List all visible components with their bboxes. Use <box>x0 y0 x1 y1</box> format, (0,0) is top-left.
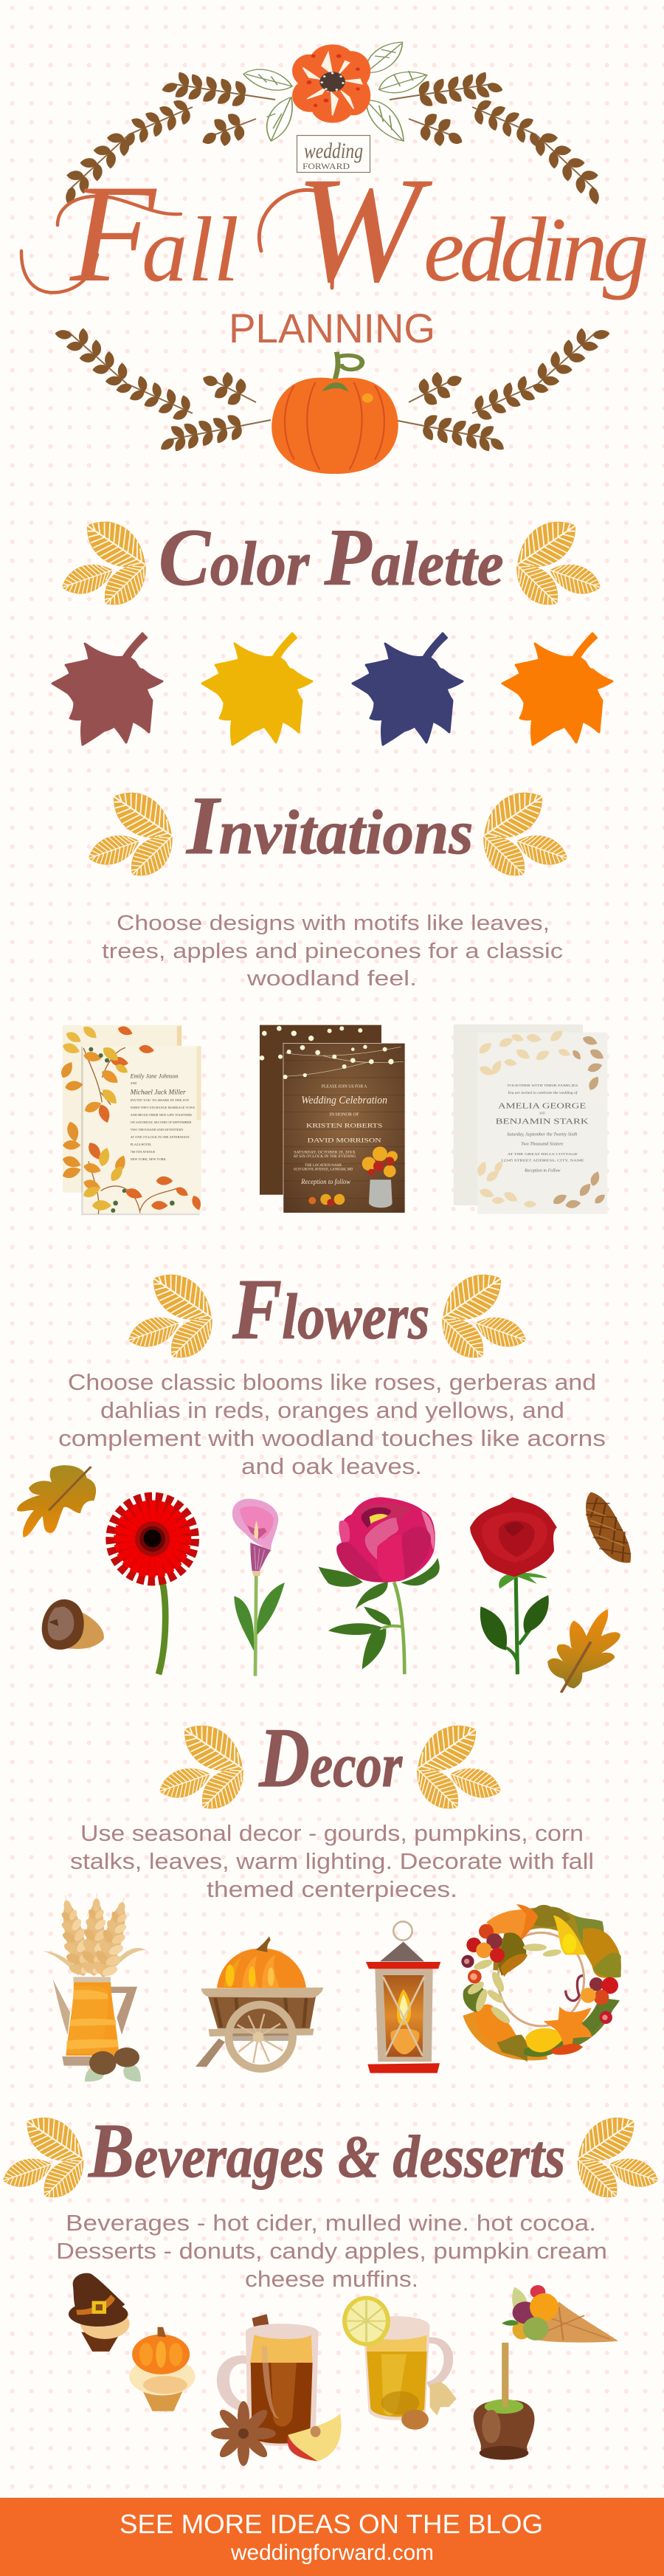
invitation cards: rustic wood: THE LOCATION NAME <box>305 1164 342 1168</box>
decor text <box>70 1820 594 1902</box>
invitation cards: watercolor leaves: AND BEGIN THEIR NEW LIFE TOGETHER <box>131 1113 192 1117</box>
invitation cards: gold foliage: BENJAMIN STARK <box>496 1118 589 1126</box>
leaf: golden yellow <box>202 633 312 745</box>
icon: oak leaf top left <box>17 1465 96 1537</box>
invitation cards: gold foliage <box>454 1024 607 1214</box>
invitation cards: rustic wood <box>260 1025 405 1213</box>
invitation cards: watercolor leaves: TWO THOUSAND AND SEVENTEEN <box>131 1128 184 1132</box>
heading text: Beverages & desserts <box>88 2109 565 2194</box>
icon: pinecone <box>586 1492 631 1563</box>
wheat ornament right <box>473 780 572 886</box>
flower with leaves <box>243 42 427 141</box>
decor: pumpkin cart <box>196 1936 323 2069</box>
logo: wedding forward: wedding <box>304 139 363 163</box>
heading text: Invitations <box>185 780 473 872</box>
wheat ornament left <box>155 1713 254 1819</box>
left branches <box>49 67 277 457</box>
invitation cards: watercolor leaves: ON SATURDAY, SECOND OF SEPTEMBER <box>131 1120 191 1125</box>
right branches <box>387 67 616 457</box>
icon: oak leaf bottom right <box>547 1609 620 1692</box>
color palette leaves <box>52 633 612 745</box>
decor: wheat in jug with acorns <box>43 1892 146 2081</box>
title: Fall Wedding <box>21 146 646 314</box>
section heading: Color Palette <box>58 509 605 615</box>
invitation cards: watercolor leaves: Emily Jane Johnson <box>130 1072 179 1080</box>
invitation cards: watercolor leaves: AT ONE O'CLOCK IN THE AFTERNOON <box>131 1135 190 1139</box>
invitation cards: watercolor leaves: PLAZA HOTEL <box>131 1143 152 1146</box>
beverage: hot cider mug <box>223 2314 319 2446</box>
wheat ornament right <box>506 509 605 615</box>
invitation cards: watercolor leaves: INVITE YOU TO SHARE IN THE JOY <box>131 1098 190 1102</box>
invitation cards: gold foliage: AMELIA GEORGE <box>498 1102 586 1110</box>
footer banner <box>0 2498 664 2576</box>
flowers text <box>58 1369 606 1479</box>
decor: lantern <box>366 1921 440 2073</box>
heading text: Color Palette <box>159 513 504 603</box>
title: Fall Wedding: all <box>142 199 262 301</box>
invitation cards: gold foliage: 12345 STREET ADDRESS, CITY, NAME <box>501 1158 585 1163</box>
wheat ornament left <box>58 509 156 615</box>
title: Fall Wedding: edding <box>423 199 646 301</box>
invitation cards: rustic wood: Reception to follow <box>300 1178 351 1186</box>
heading text: Decor <box>258 1711 403 1805</box>
decor: autumn wreath <box>461 1904 621 2062</box>
invitation cards: rustic wood: PLEASE JOIN US FOR A <box>322 1084 367 1089</box>
header wreath <box>49 42 616 457</box>
invitation cards: rustic wood: IN HONOR OF <box>330 1113 359 1117</box>
flower: red rose <box>470 1497 557 1674</box>
title: Fall Wedding: W <box>295 146 433 314</box>
section heading: Decor <box>155 1711 505 1819</box>
flower: gerbera <box>114 1501 190 1674</box>
section heading: Flowers <box>124 1261 530 1368</box>
beverages text: cheese muffins. <box>245 2266 418 2292</box>
invitations text: woodland feel. <box>246 967 417 991</box>
leaf: orange <box>502 633 612 745</box>
dessert: fruit cornucopia <box>502 2285 618 2343</box>
invitation cards: watercolor leaves: WHEN THEY EXCHANGE MARRIAGE VOWS <box>131 1106 196 1109</box>
invitation cards: watercolor leaves: AND <box>131 1081 136 1085</box>
subtitle: PLANNING: PLANNING <box>229 305 435 351</box>
dessert: pilgrim hat cupcake <box>69 2273 130 2352</box>
flowers text: dahlias in reds, oranges and yellows, and <box>100 1397 564 1423</box>
invitation cards: gold foliage: TOGETHER WITH THEIR FAMILIES <box>507 1084 578 1087</box>
invitations text: Choose designs with motifs like leaves, <box>117 912 550 935</box>
icon: acorn <box>42 1599 104 1650</box>
logo: wedding forward <box>297 136 370 173</box>
invitation cards: rustic wood: 6119 GROVE AVENUE, LANHAM, MD <box>294 1168 353 1171</box>
wheat ornament right <box>432 1262 530 1368</box>
invitation cards: rustic wood: SATURDAY, OCTOBER 28, 20XX <box>294 1151 356 1155</box>
wheat ornament right <box>407 1713 505 1819</box>
icon: star anise <box>211 2401 276 2466</box>
flowers text: complement with woodland touches like acorns <box>58 1425 606 1451</box>
beverage: lemon mug with ginger and almond <box>342 2296 457 2430</box>
beverages text <box>56 2210 607 2292</box>
wheat ornament right <box>567 2106 663 2207</box>
heading text: Flowers <box>232 1261 429 1357</box>
logo: wedding forward: FORWARD <box>302 161 350 171</box>
flowers text: Choose classic blooms like roses, gerberas and <box>68 1369 596 1395</box>
title: Fall Wedding: F <box>69 156 157 311</box>
invitation cards: rustic wood: Wedding Celebration <box>301 1095 387 1106</box>
invitation cards: watercolor leaves: Michael Jack Miller <box>130 1089 186 1096</box>
footer website: weddingforward.com <box>230 2541 434 2565</box>
section heading: Beverages & desserts <box>0 2106 663 2207</box>
decor text: stalks, leaves, warm lighting. Decorate with fall <box>70 1848 594 1874</box>
invitation cards: gold foliage: Saturday, September the Twenty Sixth <box>507 1133 577 1137</box>
decor text: themed centerpieces. <box>207 1876 457 1902</box>
wheat ornament left <box>0 2106 94 2207</box>
invitation cards: gold foliage: Reception to Follow <box>524 1168 560 1173</box>
wheat ornament left <box>124 1262 223 1368</box>
invitation cards: rustic wood: DAVID MORRISON <box>308 1137 381 1143</box>
invitation cards: gold foliage: You are invited to celebrate the wedding of <box>508 1090 578 1095</box>
wheat ornament left <box>84 780 183 886</box>
beverages text: Desserts - donuts, candy apples, pumpkin cream <box>56 2238 607 2264</box>
invitation cards: gold foliage: AND <box>539 1112 545 1115</box>
invitation cards: watercolor leaves: 768 5TH AVENUE <box>131 1150 156 1154</box>
section heading: Invitations <box>84 780 572 886</box>
invitation cards: watercolor leaves <box>58 1024 203 1215</box>
icon: pumpkin <box>272 352 398 474</box>
icon: apple wedge <box>288 2413 341 2462</box>
flower: calla lily <box>232 1499 285 1676</box>
invitation cards: gold foliage: AT THE GREAT HILLS COTTAGE <box>508 1152 578 1156</box>
decor text: Use seasonal decor - gourds, pumpkins, corn <box>80 1820 584 1846</box>
invitation cards: rustic wood: KRISTEN ROBERTS <box>306 1123 383 1129</box>
dessert: pumpkin cupcake <box>129 2327 196 2411</box>
beverages text: Beverages - hot cider, mulled wine. hot cocoa. <box>66 2210 596 2236</box>
footer call to action: SEE MORE IDEAS ON THE BLOG <box>120 2509 543 2539</box>
invitation cards: gold foliage: Two Thousand Sixteen <box>521 1142 563 1146</box>
invitations text <box>102 912 563 991</box>
dessert: caramel candy apple <box>474 2343 534 2460</box>
invitations text: trees, apples and pinecones for a classic <box>102 940 563 963</box>
leaf: navy <box>353 633 463 745</box>
leaf: maroon <box>52 633 162 745</box>
invitation cards: rustic wood: AT SIX O'CLOCK IN THE EVENING <box>293 1154 356 1159</box>
flowers text: and oak leaves. <box>241 1453 422 1479</box>
flower: peony <box>319 1497 440 1674</box>
invitation cards: watercolor leaves: NEW YORK, NEW YORK <box>131 1157 167 1162</box>
